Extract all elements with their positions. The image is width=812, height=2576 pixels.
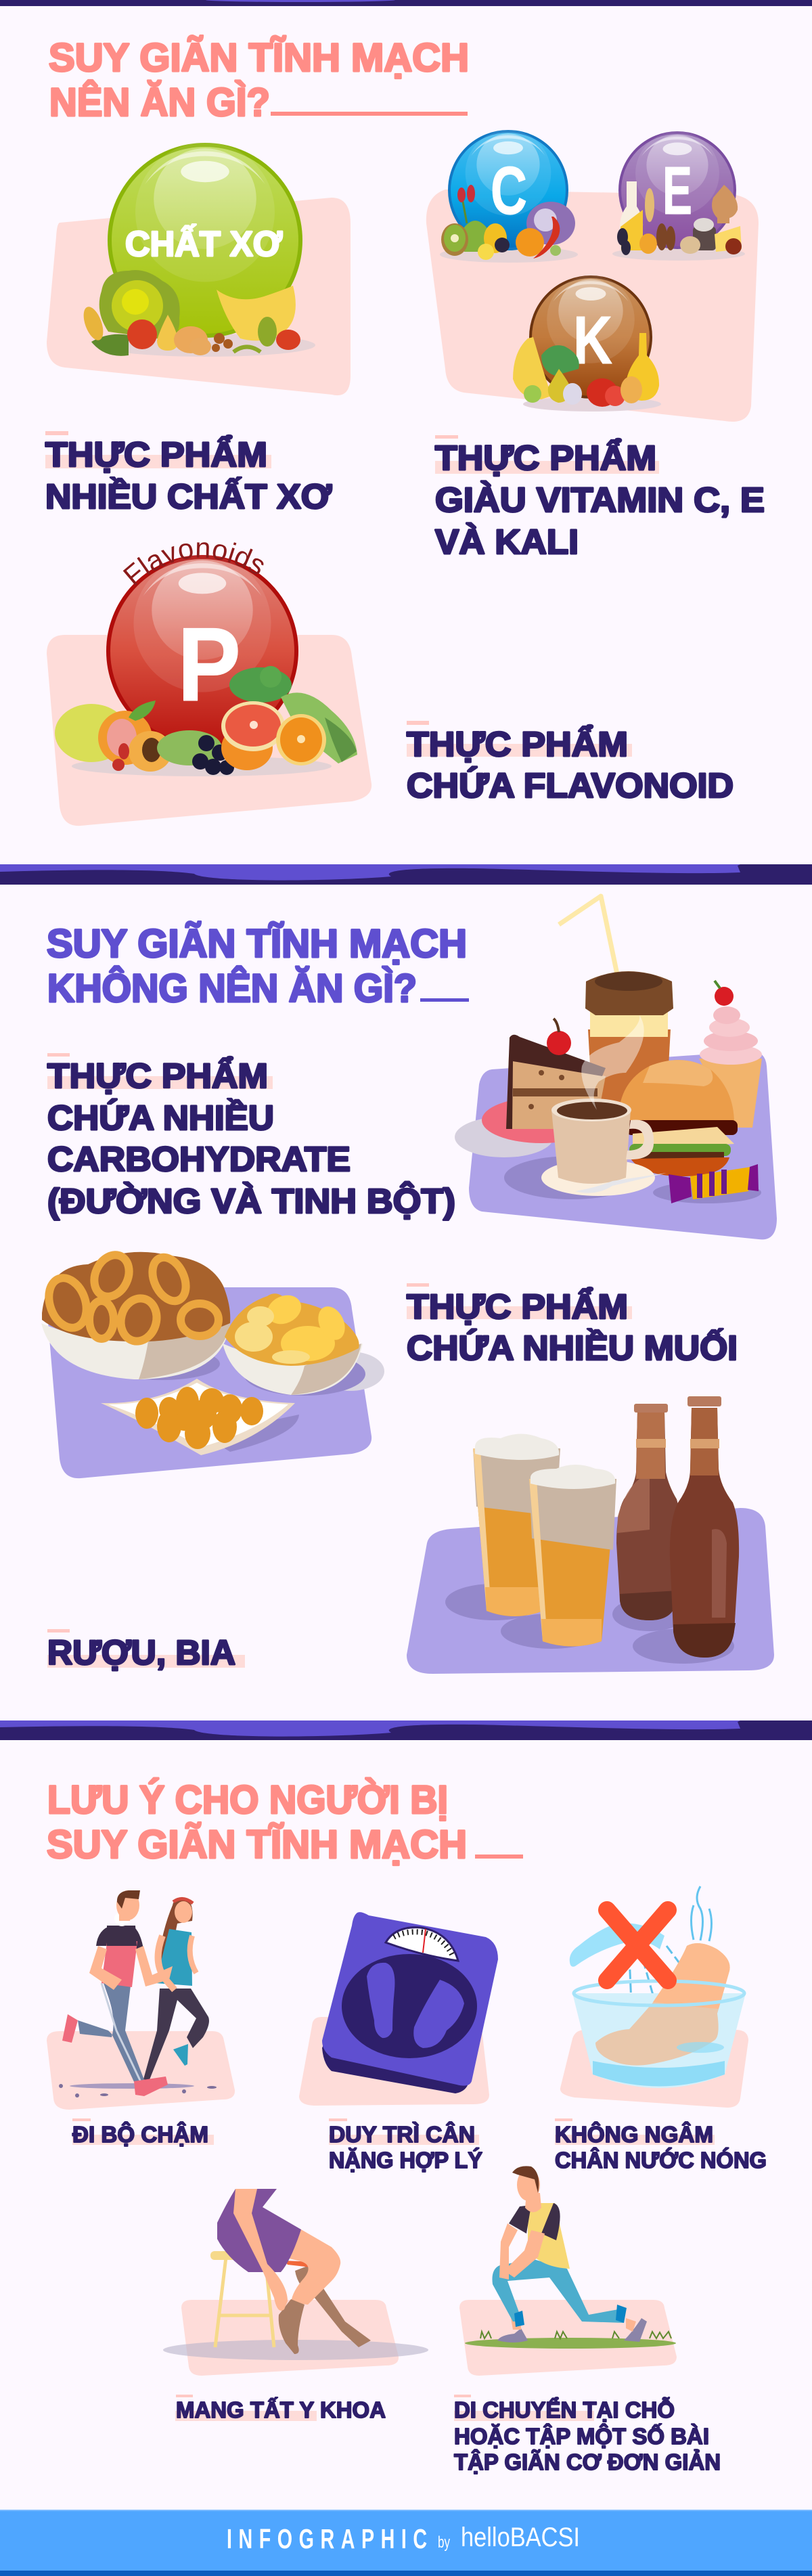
label: vitamin c, e, kali <box>435 435 765 561</box>
X mark <box>607 1910 668 1980</box>
label: chứa flavonoid: THỰC PHẨM <box>407 724 628 763</box>
footer band <box>0 2510 812 2576</box>
label: vitamin c, e, kali: VÀ KALI <box>435 523 579 561</box>
panel: flavonoid background <box>47 635 371 826</box>
man <box>62 1890 173 2096</box>
label: đi bộ chậm: ĐI BỘ CHẬM <box>72 2121 208 2147</box>
label: di chuyển tại chỗ: DI CHUYỂN TẠI CHỖ <box>454 2397 675 2422</box>
icon: foot in water with X <box>570 1886 746 2088</box>
dress <box>217 2189 301 2272</box>
label: carbohydrate <box>47 1053 455 1220</box>
heading: lưu ý: SUY GIÃN TĨNH MẠCH <box>47 1823 467 1867</box>
label: không ngâm chân <box>555 2118 767 2173</box>
label: chứa flavonoid <box>407 721 734 805</box>
section divider band <box>0 1720 812 1740</box>
food: grapes and tomato <box>233 317 300 352</box>
white plate with balls <box>101 1379 295 1455</box>
food: lemon and peach <box>55 701 172 772</box>
icon: vitamin K capsule: K <box>573 303 612 378</box>
label: không ngâm chân: CHÂN NƯỚC NÓNG <box>555 2148 767 2173</box>
label: di chuyển tại chỗ <box>454 2395 721 2474</box>
icon: beer glasses and bottles <box>445 1396 739 1664</box>
food: grapefruit and orange <box>221 701 326 770</box>
panel: hot water background <box>560 2030 748 2108</box>
panel: walking background <box>47 2031 235 2110</box>
food: potatoes <box>174 326 233 355</box>
label: nhiều muối <box>407 1283 738 1367</box>
panel: vitamins background <box>426 190 759 422</box>
section divider band <box>0 864 812 885</box>
label: di chuyển tại chỗ: TẬP GIÃN CƠ ĐƠN GIẢN <box>454 2449 721 2474</box>
heading: không nên ăn gì <box>47 922 469 1011</box>
label: carbohydrate: (ĐƯỜNG VÀ TINH BỘT) <box>47 1181 455 1220</box>
tap <box>570 1923 664 1967</box>
foot <box>595 1943 730 2066</box>
label: carbohydrate: CARBOHYDRATE <box>47 1140 351 1178</box>
label: chứa flavonoid: CHỨA FLAVONOID <box>407 766 734 805</box>
top header band <box>0 0 812 6</box>
beer glass 1 <box>473 1434 560 1616</box>
footprints <box>367 1963 464 2048</box>
straw <box>559 896 618 981</box>
footer band: helloBACSI <box>461 2523 580 2552</box>
label: không ngâm chân: KHÔNG NGÂM <box>555 2121 713 2147</box>
small bowl with chips <box>223 1290 363 1395</box>
tank <box>528 2203 570 2269</box>
food: cabbage <box>80 270 180 356</box>
glass <box>572 1993 746 2088</box>
panel: sugary foods background <box>469 1051 777 1239</box>
neck and head <box>525 2193 541 2212</box>
label: carbohydrate: THỰC PHẨM <box>47 1056 268 1095</box>
bottle 1 <box>616 1404 681 1620</box>
label: nhiều chất xơ: THỰC PHẨM <box>45 435 267 474</box>
icon: two runners <box>59 1890 217 2097</box>
heading: không nên ăn gì: KHÔNG NÊN ĂN GÌ? <box>47 967 417 1011</box>
food: berries <box>192 735 234 775</box>
panel: weight background <box>299 2017 489 2106</box>
icon: woman with compression stockings <box>163 2189 428 2360</box>
icon: vitamin C capsule: C <box>491 153 527 229</box>
heading: nên ăn gì <box>49 36 469 125</box>
heading: nên ăn gì: SUY GIÃN TĨNH MẠCH <box>49 36 469 80</box>
icon: fast food group <box>455 896 762 1203</box>
heading: lưu ý <box>47 1778 523 1867</box>
food: herbs and lettuce <box>229 666 357 763</box>
ice cream <box>699 981 762 1128</box>
stool <box>215 2257 274 2347</box>
icon: stretching man <box>465 2166 676 2349</box>
heading: không nên ăn gì: SUY GIÃN TĨNH MẠCH <box>47 922 467 966</box>
footer logo text: INFOGRAPHIC <box>227 2524 427 2554</box>
food: apple <box>127 319 157 349</box>
arms <box>499 2223 518 2280</box>
label: vitamin c, e, kali: GIÀU VITAMIN C, E <box>435 481 765 519</box>
icon: vitamin P capsule with foods <box>55 542 357 776</box>
heading: nên ăn gì: NÊN ĂN GÌ? <box>49 81 270 125</box>
beer glass 2 <box>529 1465 616 1646</box>
mug on saucer <box>541 1098 667 1196</box>
shadows <box>317 1352 384 1391</box>
label: vitamin c, e, kali: THỰC PHẨM <box>435 438 656 477</box>
burger <box>618 1060 738 1176</box>
icon: weighing scale <box>322 1912 498 2093</box>
bottle 2 <box>670 1396 739 1658</box>
dial <box>386 1928 458 1961</box>
label: nhiều muối: CHỨA NHIỀU MUỐI <box>407 1328 738 1367</box>
icon: salty snacks <box>41 1249 384 1455</box>
grass <box>465 2332 676 2349</box>
steam <box>581 1015 644 1110</box>
panel: salty snacks background <box>47 1287 371 1478</box>
label: flavonoids curved <box>134 558 265 587</box>
footer band: by <box>438 2533 450 2552</box>
water <box>593 2061 725 2086</box>
panel: exercise background <box>459 2300 677 2376</box>
label: di chuyển tại chỗ: HOẶC TẬP MỘT SỐ BÀI <box>454 2423 709 2449</box>
icon: fiber capsule with foods <box>80 143 315 357</box>
label: nhiều chất xơ <box>45 431 332 516</box>
icon: vitamin P capsule with foods: P <box>177 606 241 723</box>
label: duy trì cân nặng: DUY TRÌ CÂN <box>329 2122 475 2147</box>
food: banana <box>217 286 296 340</box>
arm <box>233 2189 288 2311</box>
pants <box>492 2259 626 2323</box>
label: duy trì cân nặng: NẶNG HỢP LÝ <box>329 2148 482 2173</box>
label: nhiều muối: THỰC PHẨM <box>407 1287 628 1326</box>
food: leaf <box>157 730 222 765</box>
label: carbohydrate: CHỨA NHIỀU <box>47 1098 274 1137</box>
icon: vitamin E capsule: E <box>662 153 692 229</box>
icon: vitamin E capsule <box>612 131 745 261</box>
shadows <box>455 1117 554 1157</box>
big bowl with rings <box>41 1249 230 1379</box>
panel: alcohol background <box>407 1508 774 1674</box>
cake <box>482 1019 606 1143</box>
food: pear <box>157 315 179 351</box>
heading: lưu ý: LƯU Ý CHO NGƯỜI BỊ <box>47 1778 448 1822</box>
water drops <box>629 1946 687 2003</box>
label: rượu bia: RƯỢU, BIA <box>47 1633 235 1672</box>
label: nhiều chất xơ: NHIỀU CHẤT XƠ <box>45 476 332 516</box>
shoes <box>497 2328 528 2342</box>
woman <box>143 1898 209 2081</box>
label: chất xơ: CHẤT XƠ <box>125 224 283 264</box>
coffee cup <box>585 971 673 1103</box>
label: mang tất y khoa: MANG TẤT Y KHOA <box>176 2397 386 2422</box>
thigh and near leg <box>284 2229 340 2305</box>
label: duy trì cân nặng <box>329 2118 482 2173</box>
steam <box>692 1886 712 1941</box>
icon: vitamin K capsule <box>513 275 661 412</box>
candy <box>669 1164 759 1203</box>
icon: vitamin P capsule with foods: Flavonoids <box>123 542 264 586</box>
panel: fiber background <box>47 198 351 395</box>
panel: stockings background <box>181 2300 399 2376</box>
far stocking leg <box>295 2264 371 2347</box>
icon: vitamin C capsule <box>440 130 578 263</box>
